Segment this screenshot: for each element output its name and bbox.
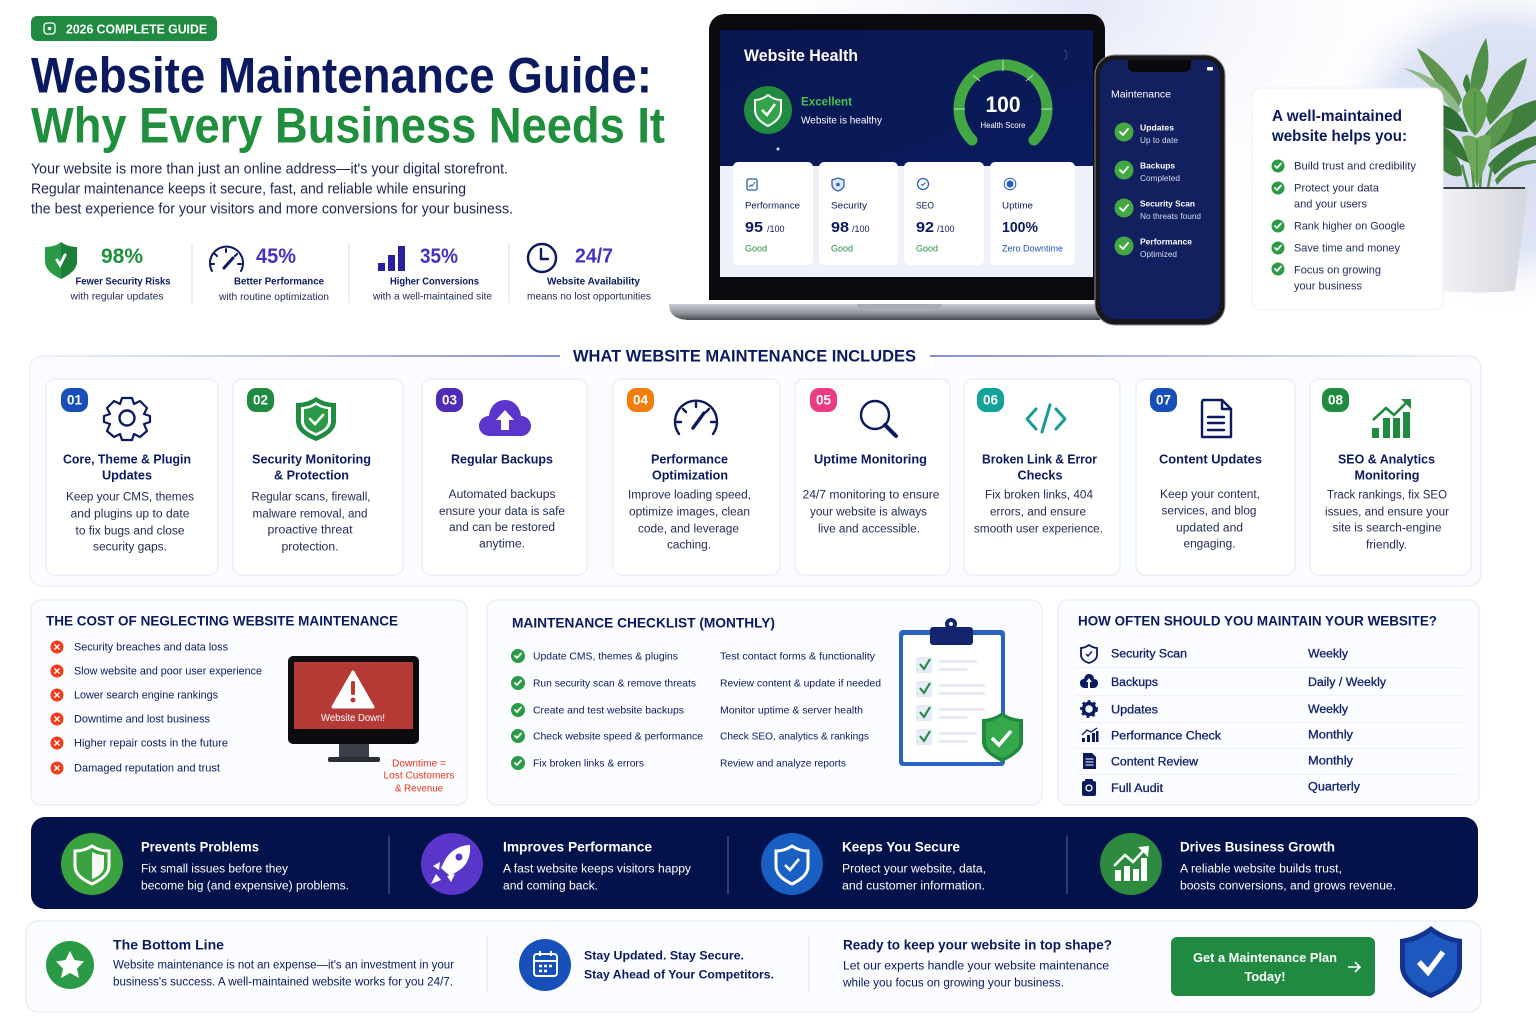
row: content review: Content Review [1111, 757, 1199, 769]
icon: upload cloud [479, 400, 531, 436]
card 06: broken link checks: Fix broken links, 404 [985, 490, 1094, 502]
card 08: seo analytics: SEO & Analytics [1338, 452, 1435, 467]
checklist column one: Run security scan & remove threats [533, 678, 696, 690]
card 05: uptime monitoring: Uptime Monitoring [814, 452, 927, 467]
card 01: core updates: security gaps. [93, 542, 167, 554]
the bottom line: Website maintenance is not an expense—it's an investment in your [113, 960, 454, 972]
stay updated: Stay Ahead of Your Competitors. [584, 970, 774, 982]
gauge: health score 100: 100 [986, 92, 1020, 117]
benefit: keeps you secure: and customer information. [842, 881, 985, 893]
row: security scan [1081, 645, 1348, 663]
card 01: core updates: and plugins up to date [70, 509, 190, 521]
stat: 45% better performance: Better Performance [234, 276, 324, 288]
icon: code brackets [1027, 405, 1065, 432]
row: security scan: Weekly [1308, 649, 1348, 661]
benefit: keeps you secure: Keeps You Secure [842, 839, 960, 855]
card 06: broken link checks: smooth user experience. [974, 524, 1103, 536]
metric card: seo: 92 [916, 219, 934, 236]
icon: monitor website down: Website Down! [321, 713, 385, 724]
panel: how often to maintain: HOW OFTEN SHOULD YOU MAINTAIN YOUR WEBSITE? [1078, 613, 1437, 629]
metric card: security: 98 [831, 219, 849, 236]
row: updates: Weekly [1308, 704, 1348, 716]
benefit list: Rank higher on Google [1294, 221, 1405, 233]
checklist column one: Update CMS, themes & plugins [533, 651, 678, 663]
title: Why Every Business Needs It [31, 98, 665, 154]
icon: clipboard with shield [899, 618, 1023, 766]
title [31, 48, 665, 154]
phone heading: Maintenance [1111, 89, 1171, 101]
panel: cost of neglecting maintenance [31, 600, 467, 805]
phone mockup [1095, 55, 1225, 325]
phone item: performance: Optimized [1140, 250, 1177, 259]
panel: monthly maintenance checklist [487, 600, 1042, 805]
card 01: core updates: 01 [67, 393, 82, 408]
phone item: security scan [1114, 198, 1201, 221]
card 07: content updates: engaging. [1184, 539, 1236, 551]
title: Website Maintenance Guide: [31, 48, 652, 104]
card 08: seo analytics: 08 [1328, 393, 1343, 408]
the bottom line: business's success. A well-maintained website works for you 24/7. [113, 977, 453, 989]
card 02: security monitoring: Regular scans, firewall, [252, 492, 370, 504]
benefit: prevents problems: Prevents Problems [141, 839, 259, 855]
callout: downtime equals lost customers: Downtime = [392, 758, 446, 770]
row: full audit: Full Audit [1111, 783, 1164, 795]
row: updates: Updates [1111, 705, 1158, 717]
card 03: regular backups: Regular Backups [451, 452, 553, 467]
button: get a maintenance plan: Today! [1244, 969, 1286, 984]
intro paragraph [31, 162, 513, 218]
card 02: security monitoring: Security Monitoring [252, 452, 371, 467]
card 07: content updates: 07 [1156, 393, 1171, 408]
badge: 2026 complete guide: 2026 COMPLETE GUIDE [66, 22, 207, 37]
card 01: core updates: Keep your CMS, themes [66, 492, 194, 504]
card 04: performance optimization: Performance [651, 452, 728, 467]
icon: green shield [45, 242, 77, 279]
phone item: security scan: No threats found [1140, 212, 1201, 221]
panel: monthly maintenance checklist: MAINTENANCE CHECKLIST (MONTHLY) [512, 615, 775, 631]
stay updated [519, 939, 774, 991]
phone item: performance: Performance [1140, 237, 1192, 247]
phone item: updates [1114, 122, 1179, 145]
plant with pot [1403, 38, 1536, 292]
risk list: Slow website and poor user experience [74, 666, 262, 678]
section heading: WHAT WEBSITE MAINTENANCE INCLUDES [573, 348, 916, 366]
callout: downtime equals lost customers: & Revenue [395, 783, 443, 795]
phone item: backups [1114, 160, 1180, 183]
card 06: broken link checks: 06 [983, 393, 998, 408]
panel heading: website helps you: [1271, 128, 1407, 145]
status: excellent: Excellent [801, 97, 852, 109]
panel heading [1271, 108, 1407, 145]
benefit: keeps you secure [761, 833, 986, 895]
panel: cost of neglecting maintenance: THE COST OF NEGLECTING WEBSITE MAINTENANCE [46, 613, 398, 629]
metric card: performance [733, 162, 813, 265]
card 06: broken link checks [964, 379, 1120, 575]
stat: 35% higher conversions [372, 245, 492, 303]
button: get a maintenance plan: Get a Maintenance Plan [1193, 950, 1337, 965]
icon: gauge [210, 247, 243, 271]
card 03: regular backups: 03 [442, 393, 457, 408]
benefit: drives business growth [1100, 833, 1396, 895]
icon: magnifier [861, 401, 896, 436]
ready to keep: Let our experts handle your website maintenance [843, 961, 1109, 973]
checklist column two: Review and analyze reports [720, 758, 846, 770]
checklist column two: Review content & update if needed [720, 678, 881, 690]
card 08: seo analytics: site is search-engine [1332, 523, 1442, 535]
benefit list: and your users [1294, 199, 1367, 211]
callout: downtime equals lost customers [384, 758, 454, 795]
stat: 98% fewer security risks: Fewer Security Risks [76, 276, 171, 288]
stat: 35% higher conversions: 35% [420, 245, 458, 268]
row: full audit: Quarterly [1308, 782, 1360, 794]
checklist column one [511, 649, 703, 770]
gauge: health score 100 [954, 60, 1052, 140]
card 02: security monitoring: protection. [282, 542, 338, 554]
stat: 98% fewer security risks: 98% [101, 245, 143, 268]
benefit: prevents problems: become big (and expensive) problems. [141, 881, 349, 893]
row: security scan: Security Scan [1111, 649, 1187, 661]
card 02: security monitoring: 02 [253, 393, 268, 408]
card 08: seo analytics [1310, 379, 1471, 575]
card 04: performance optimization: code, and leverage [638, 524, 739, 536]
checklist column two: Monitor uptime & server health [720, 705, 863, 717]
card 01: core updates: Updates [102, 468, 152, 483]
icon: monitor website down [288, 656, 419, 762]
ready to keep [842, 937, 1112, 990]
checklist column one: Check website speed & performance [533, 731, 703, 743]
checklist column one: Fix broken links & errors [533, 758, 644, 770]
pot [1443, 188, 1528, 292]
metric card: uptime: 100% [1002, 219, 1038, 236]
row: performance check: Monthly [1308, 730, 1353, 742]
panel: what website maintenance includes [30, 345, 1481, 586]
card 07: content updates: Content Updates [1159, 452, 1262, 467]
row: content review: Monthly [1308, 756, 1353, 768]
panel: how often to maintain [1058, 600, 1479, 805]
icon: bar chart [378, 246, 405, 271]
icon: growth chart [1372, 399, 1411, 438]
card 02: security monitoring: proactive threat [268, 525, 353, 537]
benefit list: Save time and money [1294, 243, 1400, 255]
card 04: performance optimization: optimize images, clean [629, 507, 750, 519]
card 01: core updates [46, 379, 218, 575]
benefit: improves performance: and coming back. [503, 881, 598, 893]
card 08: seo analytics: Monitoring [1354, 468, 1420, 483]
metric card: security [819, 162, 898, 265]
stat: 45% better performance: with routine optimization [218, 291, 329, 303]
card 05: uptime monitoring: your website is always [810, 507, 927, 519]
risk list [50, 640, 262, 775]
risk list: Damaged reputation and trust [74, 763, 220, 775]
card 03: regular backups: ensure your data is safe [439, 506, 565, 518]
stat: 35% higher conversions: Higher Conversions [390, 276, 479, 288]
card 06: broken link checks: errors, and ensure [990, 507, 1086, 519]
checklist column two: Test contact forms & functionality [720, 651, 876, 663]
benefit list: Build trust and credibility [1294, 161, 1416, 173]
card 05: uptime monitoring [795, 379, 950, 575]
card 07: content updates: Keep your content, [1160, 489, 1260, 501]
benefit list: your business [1294, 281, 1362, 293]
card 03: regular backups: and can be restored [449, 522, 555, 534]
checklist column two: Check SEO, analytics & rankings [720, 731, 869, 743]
card 03: regular backups: anytime. [479, 539, 525, 551]
card 03: regular backups [422, 379, 587, 575]
card 06: broken link checks: Broken Link & Error [982, 452, 1097, 467]
card 04: performance optimization: Improve loading speed, [628, 490, 751, 502]
phone item: backups: Backups [1140, 161, 1175, 171]
benefit: drives business growth: boosts conversions, and grows revenue. [1180, 881, 1396, 893]
stay updated: Stay Updated. Stay Secure. [584, 951, 744, 963]
metric card: security: Good [831, 244, 853, 254]
card 02: security monitoring: & Protection [274, 468, 349, 483]
row: backups: Backups [1111, 677, 1158, 689]
card 08: seo analytics: Track rankings, fix SEO [1327, 490, 1447, 502]
card 04: performance optimization: 04 [633, 393, 648, 408]
phone item: performance [1114, 236, 1192, 259]
row: backups [1080, 674, 1386, 689]
intro paragraph: Regular maintenance keeps it secure, fast, and reliable while ensuring [31, 182, 466, 198]
the bottom line: The Bottom Line [113, 937, 224, 953]
metric card: uptime: Zero Downtime [1002, 244, 1063, 254]
status: excellent [744, 86, 883, 134]
ready to keep: while you focus on growing your business. [842, 978, 1064, 990]
phone item: backups: Completed [1140, 174, 1180, 183]
metric card: performance: Good [745, 244, 767, 254]
card 07: content updates: updated and [1176, 523, 1243, 535]
card 04: performance optimization: caching. [667, 540, 711, 552]
benefit: prevents problems [61, 833, 349, 895]
metric card: security: Security [831, 201, 868, 211]
metric card: uptime [990, 162, 1075, 265]
row: full audit [1082, 779, 1360, 796]
metric card: performance: /100 [767, 224, 785, 234]
benefit: improves performance: A fast website keeps visitors happy [503, 864, 691, 876]
icon: gear [104, 398, 150, 440]
laptop mockup [669, 14, 1105, 320]
dark benefits banner [31, 817, 1478, 909]
ready to keep: Ready to keep your website in top shape? [843, 937, 1112, 953]
card 04: performance optimization: Optimization [652, 468, 728, 483]
checklist column one: Create and test website backups [533, 705, 684, 717]
benefit: prevents problems: Fix small issues before they [141, 864, 288, 876]
badge: 2026 complete guide [31, 16, 217, 41]
card 07: content updates: services, and blog [1162, 506, 1256, 518]
row: backups: Daily / Weekly [1308, 677, 1386, 689]
intro paragraph: the best experience for your visitors and more conversions for your business. [31, 202, 513, 218]
benefit: drives business growth: A reliable website builds trust, [1180, 864, 1342, 876]
metric card: performance: 95 [745, 219, 763, 236]
icon: blue shield [1400, 926, 1462, 998]
metric card: seo [904, 162, 984, 265]
icon: clock [528, 244, 556, 272]
bottom call-to-action panel [26, 921, 1481, 1012]
button: get a maintenance plan [1171, 937, 1375, 996]
callout: downtime equals lost customers: Lost Customers [384, 770, 454, 782]
row: updates [1081, 701, 1348, 717]
gauge: health score 100: Health Score [980, 121, 1026, 130]
card 05: uptime monitoring: 05 [816, 393, 831, 408]
icon: speedometer [675, 401, 717, 434]
intro paragraph: Your website is more than just an online address—it's your digital storefront. [31, 162, 508, 178]
row: performance check [1082, 728, 1353, 743]
benefit: improves performance [421, 833, 691, 895]
card 05: uptime monitoring: 24/7 monitoring to ensure [802, 490, 940, 502]
icon: document [1202, 400, 1231, 437]
row: performance check: Performance Check [1111, 731, 1221, 743]
card 04: performance optimization [613, 379, 780, 575]
stat: 45% better performance [210, 245, 329, 303]
card 08: seo analytics: friendly. [1366, 540, 1407, 552]
card 08: seo analytics: issues, and ensure your [1325, 507, 1449, 519]
card 06: broken link checks: Checks [1018, 468, 1062, 483]
metric card: seo: Good [916, 244, 938, 254]
card 02: security monitoring [233, 379, 403, 575]
stat: 24/7 website availability: Website Availability [547, 276, 640, 288]
heading: website health: Website Health [744, 46, 858, 65]
risk list: Downtime and lost business [74, 714, 210, 726]
risk list: Lower search engine rankings [74, 690, 218, 702]
card 01: core updates: Core, Theme & Plugin [63, 452, 191, 467]
panel heading: A well-maintained [1272, 108, 1402, 125]
row: content review [1083, 753, 1353, 769]
card 05: uptime monitoring: live and accessible. [818, 524, 920, 536]
the bottom line [46, 937, 454, 989]
card 07: content updates [1136, 379, 1295, 575]
phone item: security scan: Security Scan [1140, 199, 1195, 209]
metric card: uptime: Uptime [1002, 201, 1033, 211]
stat: 24/7 website availability: means no lost opportunities [527, 291, 651, 303]
panel: well-maintained website helps you [1252, 88, 1443, 310]
stat: 98% fewer security risks [45, 242, 171, 303]
benefit list [1272, 160, 1416, 293]
status: excellent: Website is healthy [801, 115, 883, 127]
phone item: updates: Updates [1140, 123, 1174, 133]
card 02: security monitoring: malware removal, and [252, 509, 368, 521]
stat: 35% higher conversions: with a well-maintained site [372, 291, 492, 303]
stat: 24/7 website availability: 24/7 [575, 246, 613, 268]
stat: 24/7 website availability [527, 244, 651, 303]
metric card: security: /100 [852, 224, 870, 234]
benefit list: Protect your data [1294, 183, 1380, 195]
benefit: improves performance: Improves Performance [503, 839, 652, 855]
icon: shield check [296, 397, 336, 441]
risk list: Security breaches and data loss [74, 642, 228, 654]
phone item: updates: Up to date [1140, 136, 1179, 145]
benefit list: Focus on growing [1294, 265, 1381, 277]
metric card: seo: SEO [916, 201, 934, 211]
benefit: keeps you secure: Protect your website, data, [842, 864, 986, 876]
metric card: seo: /100 [937, 224, 955, 234]
benefit: drives business growth: Drives Business Growth [1180, 839, 1335, 855]
metric card: performance: Performance [745, 201, 800, 211]
stat: 98% fewer security risks: with regular updates [70, 291, 164, 303]
card 01: core updates: to fix bugs and close [76, 526, 184, 538]
risk list: Higher repair costs in the future [74, 738, 228, 750]
checklist column two [720, 651, 881, 770]
card 03: regular backups: Automated backups [448, 489, 556, 501]
stat: 45% better performance: 45% [256, 245, 296, 268]
